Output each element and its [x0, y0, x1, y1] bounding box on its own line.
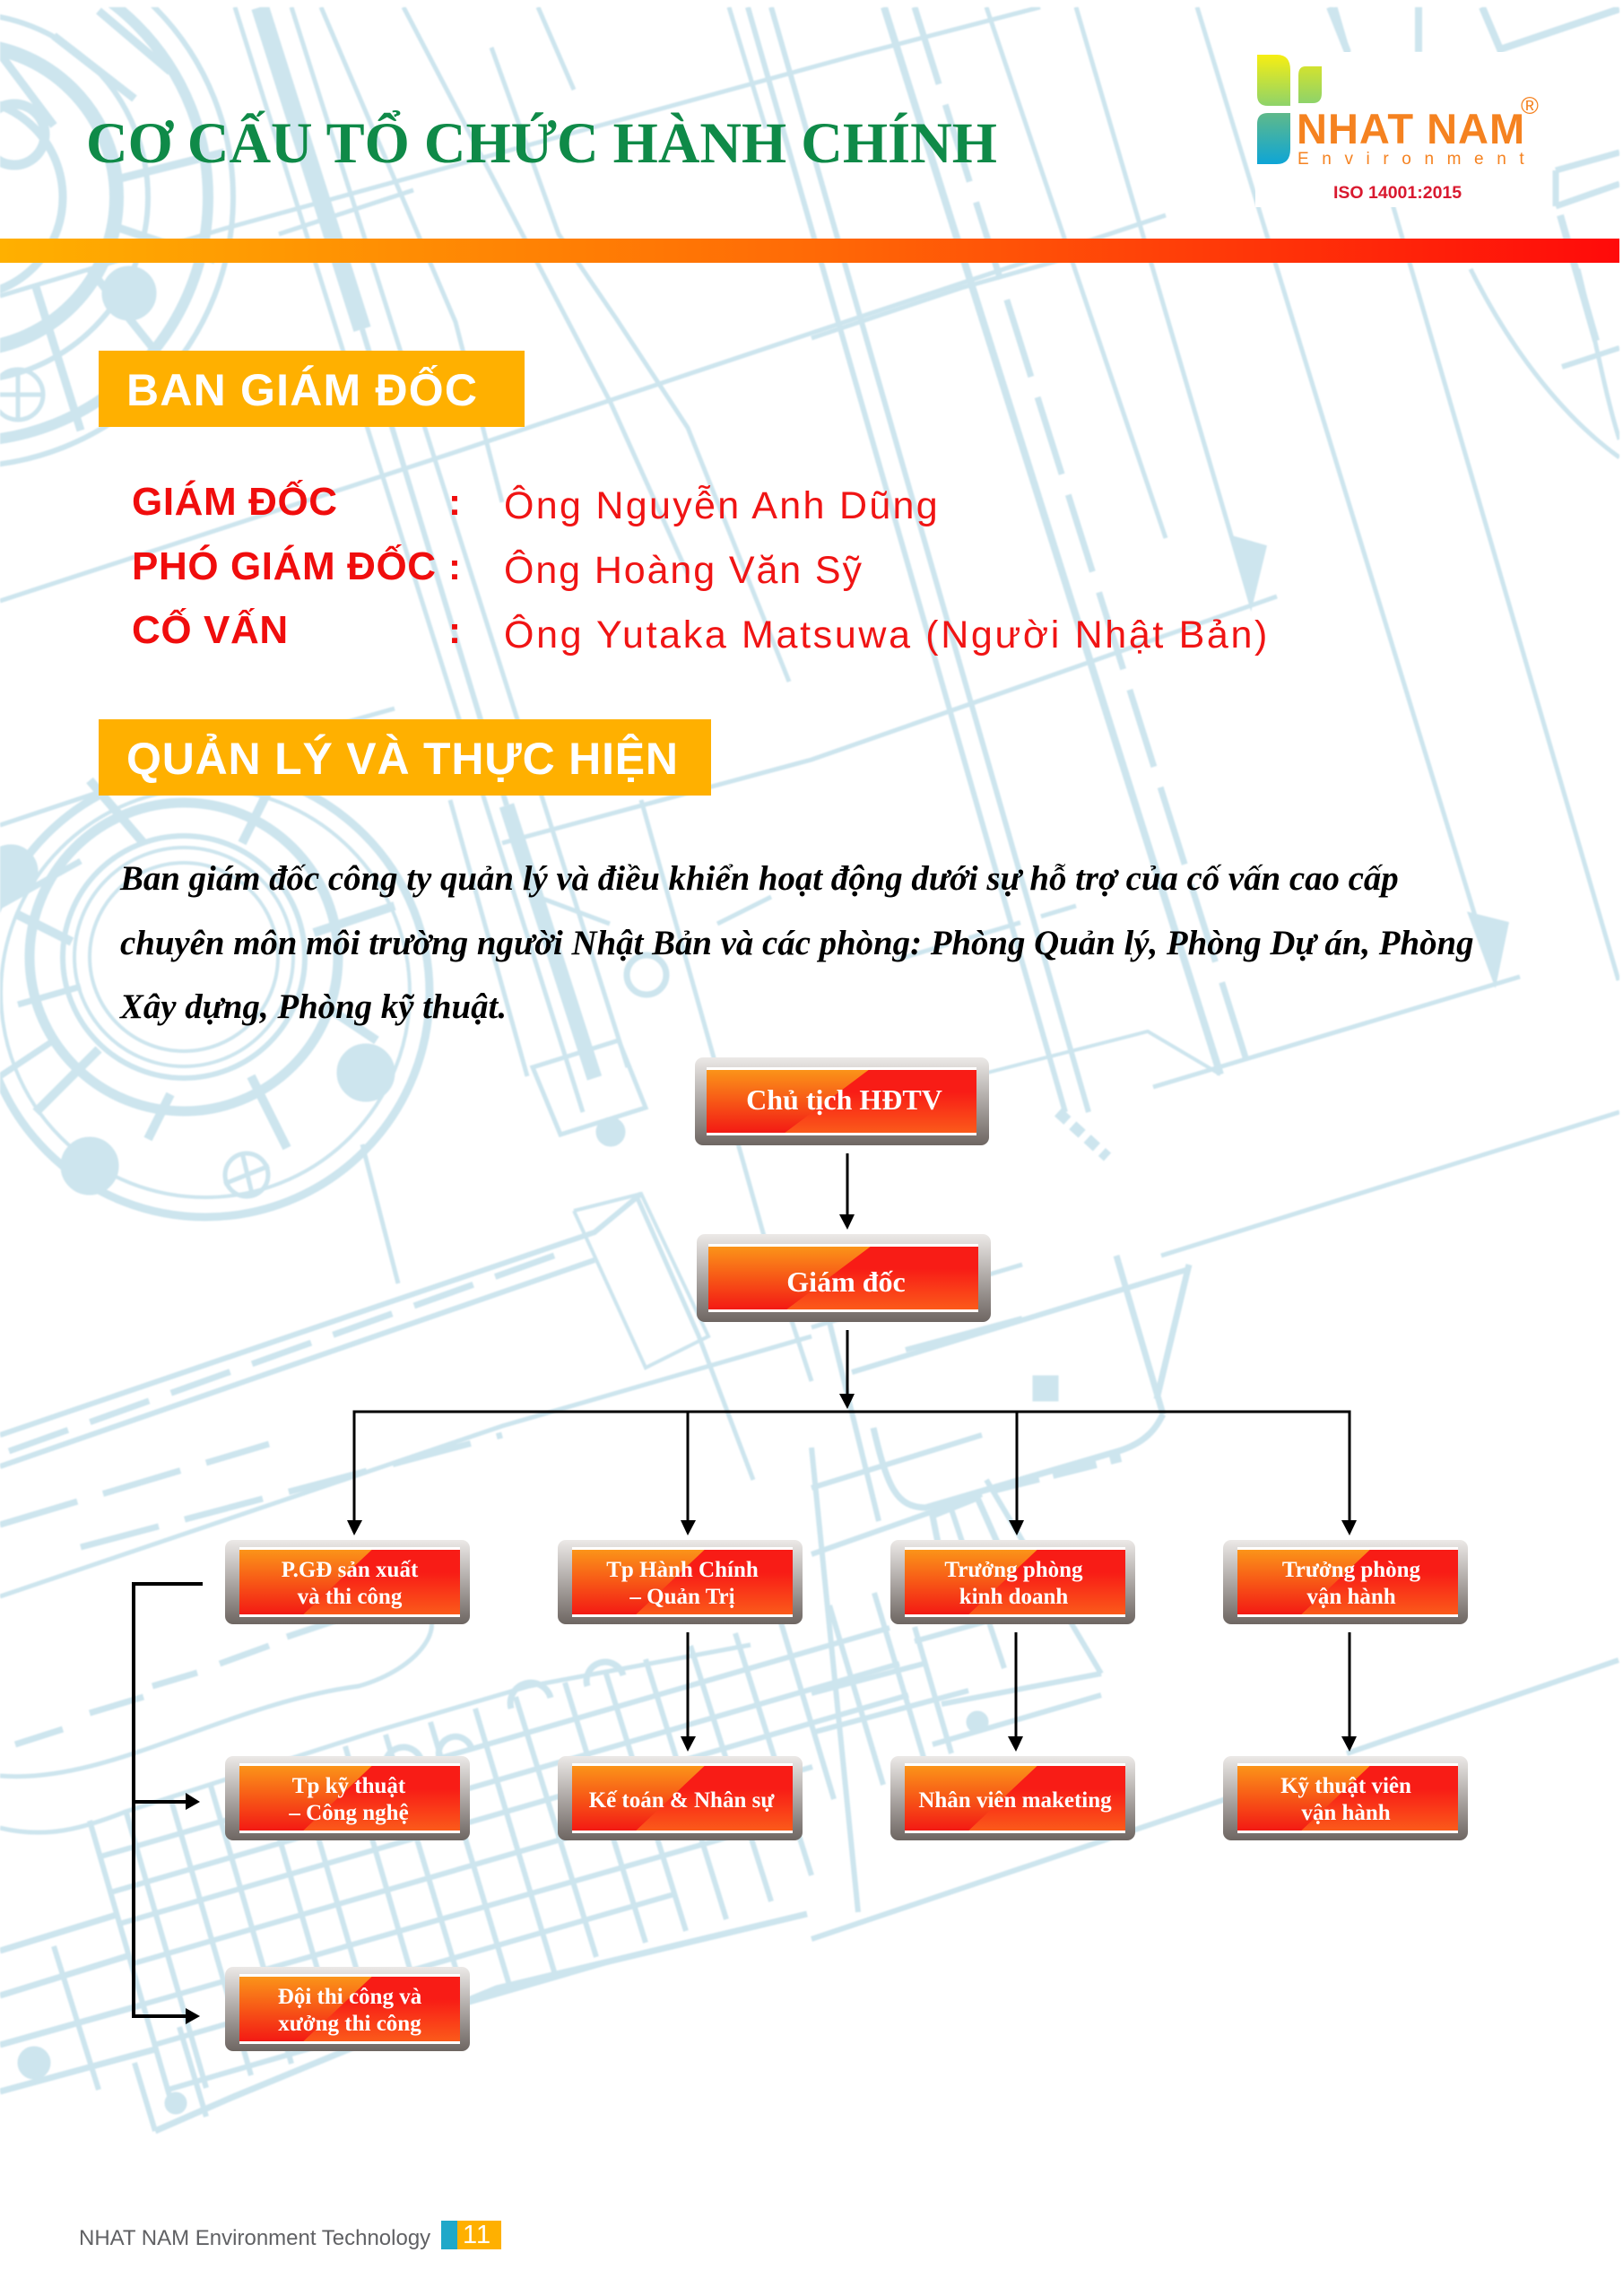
- box: P.GĐ sản xuất và thi công: P.GĐ sản xuất: [282, 1558, 418, 1582]
- box: Trưởng phòng vận hành: [1223, 1540, 1468, 1624]
- heading: Quản lý và thực hiện: QUẢN LÝ VÀ THỰC HIỆN: [126, 734, 679, 784]
- row: phó giám đốc colon: :: [448, 545, 461, 587]
- box: Trưởng phòng kinh doanh: [890, 1540, 1135, 1624]
- arrow: chủ tịch to giám đốc: [839, 1153, 855, 1230]
- box: P.GĐ sản xuất và thi công: và thi công: [298, 1585, 402, 1609]
- box: Kế toán & Nhân sự: Kế toán & Nhân sự: [589, 1788, 774, 1813]
- box: Chủ tịch HĐTV: [695, 1057, 989, 1145]
- row: giám đốc label: GIÁM ĐỐC: [132, 480, 338, 524]
- row: giám đốc colon: :: [448, 481, 461, 523]
- box: Kế toán & Nhân sự: [558, 1756, 803, 1840]
- connector: horizontal bus with four drops: [354, 1412, 1350, 1525]
- heading: Ban giám đốc: [99, 351, 525, 427]
- box: Giám đốc: [697, 1234, 991, 1322]
- box: Nhân viên maketing: Nhân viên maketing: [918, 1788, 1112, 1813]
- box: Tp kỹ thuật – Công nghệ: [225, 1756, 470, 1840]
- arrow: vận hành to kỹ thuật viên: [1341, 1632, 1357, 1752]
- box: Kỹ thuật viên vận hành: vận hành: [1301, 1801, 1391, 1825]
- box: Giám đốc: Giám đốc: [786, 1265, 906, 1298]
- row: cố vấn colon: :: [448, 609, 461, 651]
- box: Trưởng phòng vận hành: Trưởng phòng: [1282, 1558, 1420, 1582]
- box: Trưởng phòng vận hành: vận hành: [1306, 1585, 1396, 1609]
- header gradient bar: [0, 239, 1619, 263]
- logo subtitle: Environment: [1298, 150, 1537, 169]
- arrow heads: row one: [347, 1520, 1357, 1535]
- arrow: giám đốc to bus: [839, 1330, 855, 1409]
- title: CƠ CẤU TỔ CHỨC HÀNH CHÍNH: [86, 111, 997, 175]
- logo: Nhat Nam Environment: [1255, 52, 1549, 207]
- leadership list: [132, 480, 1270, 657]
- row: cố vấn name: Ông Yutaka Matsuwa (Người Nhật Bản): [504, 613, 1270, 657]
- box: Đội thi công và xưởng thi công: xưởng thi công: [278, 2012, 421, 2036]
- box: Kỹ thuật viên vận hành: [1223, 1756, 1468, 1840]
- box: Trưởng phòng kinh doanh: Trưởng phòng: [944, 1558, 1083, 1582]
- row: cố vấn label: CỐ VẤN: [132, 608, 289, 652]
- heading: Ban giám đốc: BAN GIÁM ĐỐC: [126, 365, 478, 415]
- box: Tp Hành Chính – Quản Trị: – Quản Trị: [629, 1585, 735, 1609]
- page number badge: [441, 2221, 501, 2249]
- box: Nhân viên maketing: [890, 1756, 1135, 1840]
- footer text: NHAT NAM Environment Technology: [79, 2226, 430, 2250]
- bracket: left branch with two arrows: [134, 1584, 203, 2024]
- box: Tp Hành Chính – Quản Trị: Tp Hành Chính: [606, 1558, 759, 1582]
- row: giám đốc name: Ông Nguyễn Anh Dũng: [504, 484, 940, 527]
- ISO label: ISO 14001:2015: [1333, 183, 1462, 203]
- paragraph line 2: chuyên môn môi trường người Nhật Bản và các phòng: Phòng Quản lý, Phòng Dự án, Phòng: [120, 924, 1474, 962]
- box: Tp kỹ thuật – Công nghệ: – Công nghệ: [289, 1801, 409, 1825]
- box: Tp Hành Chính – Quản Trị: [558, 1540, 803, 1624]
- logo wordmark: NHAT NAM: [1297, 105, 1525, 152]
- box: Chủ tịch HĐTV: Chủ tịch HĐTV: [746, 1083, 942, 1116]
- page number: 11: [463, 2221, 491, 2249]
- box: Đội thi công và xưởng thi công: Đội thi công và: [278, 1985, 421, 2009]
- paragraph: [119, 859, 1474, 1026]
- box: Tp kỹ thuật – Công nghệ: Tp kỹ thuật: [292, 1774, 405, 1798]
- heading: Quản lý và thực hiện: [99, 719, 711, 796]
- row: phó giám đốc name: Ông Hoàng Văn Sỹ: [504, 549, 864, 592]
- paragraph line 1: Ban giám đốc công ty quản lý và điều khiển hoạt động dưới sự hỗ trợ của cố vấn cao cấp: [120, 859, 1399, 898]
- box: P.GĐ sản xuất và thi công: [225, 1540, 470, 1624]
- icon: leaf shapes: [1257, 55, 1322, 164]
- box: Đội thi công và xưởng thi công: [225, 1967, 470, 2051]
- arrow: hành chính to kế toán: [681, 1632, 696, 1752]
- arrow: kinh doanh to marketing: [1008, 1632, 1023, 1752]
- logo registered mark: ®: [1521, 92, 1539, 119]
- badge blue tab: [441, 2221, 457, 2249]
- box: Kỹ thuật viên vận hành: Kỹ thuật viên: [1280, 1774, 1411, 1798]
- row: phó giám đốc label: PHÓ GIÁM ĐỐC: [132, 544, 437, 588]
- paragraph line 3: Xây dựng, Phòng kỹ thuật.: [120, 987, 507, 1026]
- box: Trưởng phòng kinh doanh: kinh doanh: [959, 1585, 1068, 1609]
